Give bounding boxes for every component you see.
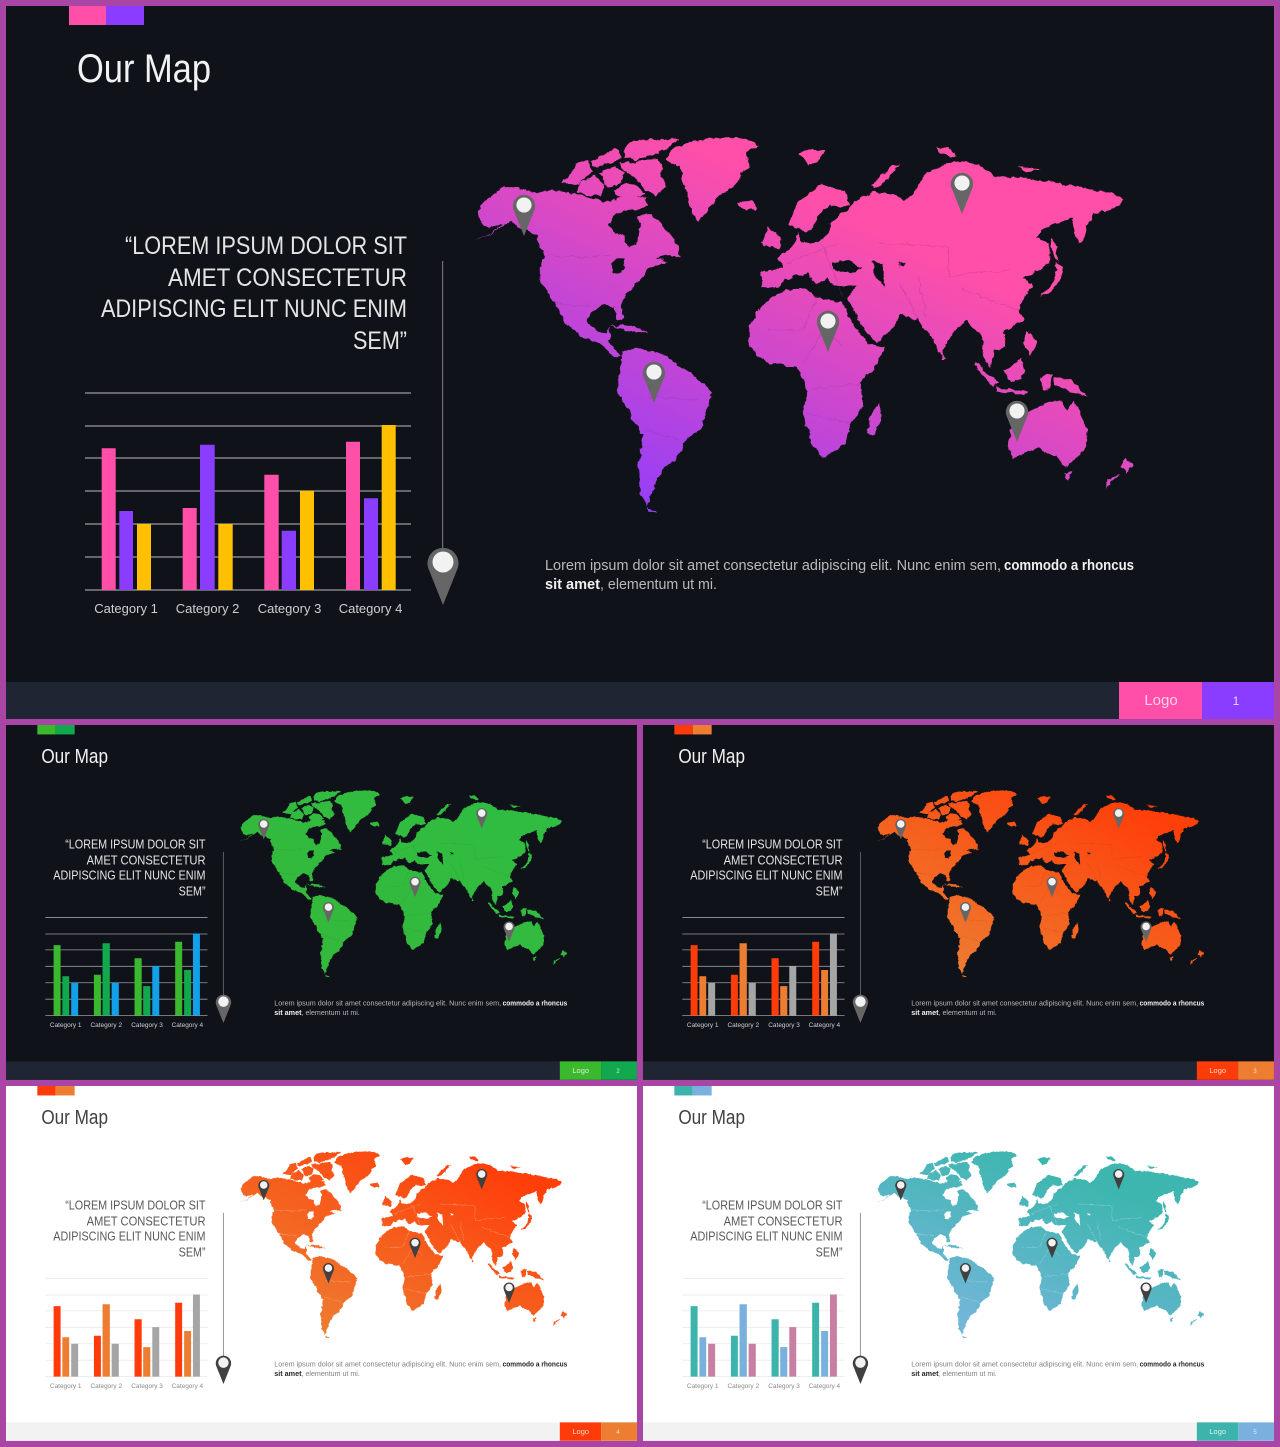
bar chart: Category 1 [687,1383,719,1390]
body text: , elementum ut mi. [939,1008,997,1017]
bar chart [682,918,845,1029]
vertical connector line [222,852,225,996]
body text: , elementum ut mi. [302,1369,360,1378]
body text [274,999,567,1017]
slide 2: dark green map slide [6,725,637,1080]
map pins [258,808,515,942]
title: Our Map [41,746,108,768]
bar chart: Category 2 [90,1383,122,1390]
footer bar: 5 [1253,1430,1257,1436]
body text: Lorem ipsum dolor sit amet consectetur adipiscing elit. Nunc enim sem, [545,558,1001,574]
footer bar [6,1422,637,1441]
footer bar [643,1422,1274,1441]
slide background [6,725,637,1080]
quote text: AMET CONSECTETUR [168,264,407,292]
quote text: SEM” [179,885,206,899]
bar chart: Category 4 [809,1383,841,1390]
bar chart: Category 4 [809,1022,841,1029]
map pins [895,808,1152,942]
accent tab [674,1086,712,1095]
footer bar: Logo [1209,1427,1226,1436]
bar chart: Category 4 [172,1022,204,1029]
accent tab [37,1086,75,1095]
quote text: ADIPISCING ELIT NUNC ENIM [53,869,206,883]
body text: sit amet [274,1008,302,1017]
body text: sit amet [911,1369,939,1378]
slide background [6,6,1274,719]
footer bar: 3 [1253,1069,1257,1075]
quote text: ADIPISCING ELIT NUNC ENIM [101,295,407,323]
vertical connector line [442,261,443,551]
footer bar: Logo [1144,692,1178,709]
icon: large location pin [853,995,868,1023]
body text [545,558,1134,593]
bar chart [45,918,208,1029]
quote text: AMET CONSECTETUR [724,1214,843,1228]
bar chart: Category 4 [339,601,402,616]
footer bar: 4 [616,1430,620,1436]
accent tab [674,725,712,734]
bar chart: Category 3 [258,601,321,616]
slide background [643,725,1274,1080]
body text: , elementum ut mi. [600,577,717,593]
body text: Lorem ipsum dolor sit amet consectetur adipiscing elit. Nunc enim sem, [274,1360,501,1369]
body text: Lorem ipsum dolor sit amet consectetur adipiscing elit. Nunc enim sem, [911,1360,1138,1369]
footer bar: Logo [1209,1066,1226,1075]
icon: large location pin [216,995,231,1023]
bar chart: Category 3 [131,1383,163,1390]
bar chart: Category 3 [131,1022,163,1029]
bar chart: Category 2 [727,1383,759,1390]
body text: sit amet [545,577,600,593]
title: Our Map [678,1107,745,1129]
body text: commodo a rhoncus [1140,999,1204,1008]
body text: sit amet [274,1369,302,1378]
body text: commodo a rhoncus [503,1360,567,1369]
icon: large location pin [428,548,458,605]
bar chart: Category 2 [727,1022,759,1029]
bar chart [85,393,411,616]
body text: commodo a rhoncus [1140,1360,1204,1369]
bar chart: Category 1 [50,1022,82,1029]
body text: commodo a rhoncus [503,999,567,1008]
world map [238,790,567,977]
body text: Lorem ipsum dolor sit amet consectetur adipiscing elit. Nunc enim sem, [274,999,501,1008]
quote text: “LOREM IPSUM DOLOR SIT [125,232,407,260]
quote text: ADIPISCING ELIT NUNC ENIM [53,1230,206,1244]
world map [875,1151,1204,1338]
world map [875,790,1204,977]
bar chart: Category 1 [50,1383,82,1390]
vertical connector line [859,1213,862,1357]
title: Our Map [77,47,211,91]
map pins [513,173,1028,442]
quote text: AMET CONSECTETUR [87,853,206,867]
quote text: AMET CONSECTETUR [724,853,843,867]
bar chart: Category 1 [94,601,158,616]
body text: , elementum ut mi. [302,1008,360,1017]
vertical connector line [859,852,862,996]
body text: commodo a rhoncus [1004,558,1134,574]
quote text [690,1198,843,1260]
body text [911,999,1204,1017]
footer bar [643,1061,1274,1080]
footer bar [6,1061,637,1080]
body text: , elementum ut mi. [939,1369,997,1378]
slide 1: large dark pink and purple map slide [6,6,1274,719]
body text: Lorem ipsum dolor sit amet consectetur adipiscing elit. Nunc enim sem, [911,999,1138,1008]
footer bar: Logo [572,1427,589,1436]
slide 3: dark orange map slide [643,725,1274,1080]
quote text [53,837,206,899]
quote text: AMET CONSECTETUR [87,1214,206,1228]
footer bar: 2 [616,1069,620,1075]
bar chart: Category 1 [687,1022,719,1029]
vertical connector line [222,1213,225,1357]
quote text: “LOREM IPSUM DOLOR SIT [65,837,206,851]
map pins [258,1169,515,1303]
footer bar: 1 [1233,694,1240,708]
quote text: “LOREM IPSUM DOLOR SIT [65,1198,206,1212]
quote text [53,1198,206,1260]
quote text [690,837,843,899]
slide background [6,1086,637,1441]
footer bar [6,682,1274,719]
title: Our Map [678,746,745,768]
icon: large location pin [853,1356,868,1384]
bar chart: Category 3 [768,1383,800,1390]
body text [274,1360,567,1378]
body text: sit amet [911,1008,939,1017]
quote text: “LOREM IPSUM DOLOR SIT [702,837,843,851]
slide 4: light orange map slide [6,1086,637,1441]
quote text: SEM” [816,885,843,899]
bar chart: Category 2 [176,601,239,616]
map pins [895,1169,1152,1303]
accent tab [37,725,75,734]
bar chart [45,1279,208,1390]
quote text: ADIPISCING ELIT NUNC ENIM [690,1230,843,1244]
footer bar: Logo [572,1066,589,1075]
slide 5: light teal and blue map slide [643,1086,1274,1441]
quote text [101,232,407,355]
slide background [643,1086,1274,1441]
world map [238,1151,567,1338]
world map [472,137,1133,513]
bar chart [682,1279,845,1390]
accent tab [69,6,144,25]
bar chart: Category 3 [768,1022,800,1029]
quote text: ADIPISCING ELIT NUNC ENIM [690,869,843,883]
quote text: “LOREM IPSUM DOLOR SIT [702,1198,843,1212]
quote text: SEM” [816,1246,843,1260]
quote text: SEM” [179,1246,206,1260]
quote text: SEM” [353,327,407,355]
bar chart: Category 2 [90,1022,122,1029]
body text [911,1360,1204,1378]
title: Our Map [41,1107,108,1129]
bar chart: Category 4 [172,1383,204,1390]
icon: large location pin [216,1356,231,1384]
